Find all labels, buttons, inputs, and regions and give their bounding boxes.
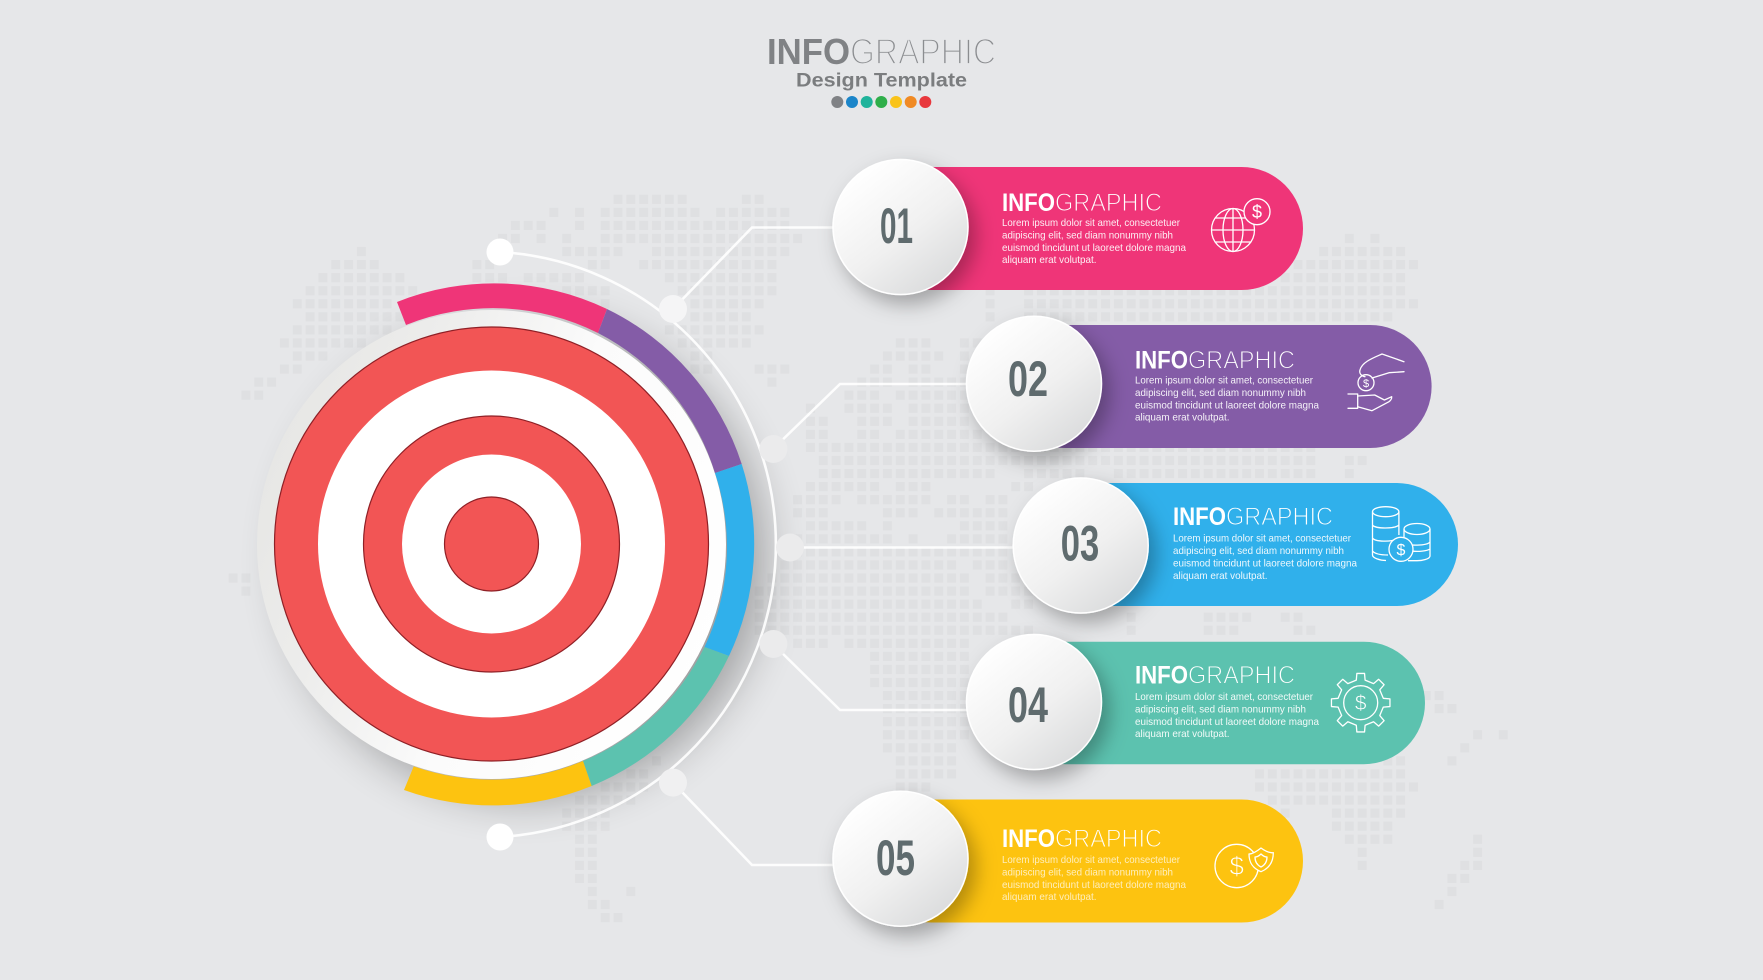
icon: globe and dollar coin: $ (1252, 202, 1262, 222)
body text (1002, 218, 1186, 266)
body text: aliquam erat volutpat. (1135, 729, 1230, 740)
pill (1050, 483, 1458, 606)
body text: Lorem ipsum dolor sit amet, consectetuer (1135, 376, 1314, 386)
body text: Lorem ipsum dolor sit amet, consectetuer (1135, 692, 1314, 703)
body text: aliquam erat volutpat. (1002, 892, 1096, 903)
panel: 04 teal (966, 634, 1425, 770)
body text: euismod tincidunt ut laoreet dolore magna (1135, 400, 1319, 411)
heading: GRAPHIC (1226, 503, 1333, 531)
body text: Lorem ipsum dolor sit amet, consectetuer (1002, 855, 1181, 866)
pill (1004, 325, 1432, 448)
body text (1135, 376, 1319, 424)
icon: globe and dollar coin (1212, 199, 1270, 252)
heading: INFO (1173, 503, 1226, 531)
number 02: 02 (1008, 351, 1048, 407)
dotted world map (227, 193, 1510, 924)
icon: coin stacks: $ (1397, 542, 1406, 559)
body text: adipiscing elit, sed diam nonummy nibh (1002, 230, 1173, 241)
body text: adipiscing elit, sed diam nonummy nibh (1173, 546, 1344, 557)
connector nodes (486, 238, 804, 850)
body text: euismod tincidunt ut laoreet dolore magna (1135, 717, 1319, 728)
heading: GRAPHIC (1055, 825, 1162, 853)
heading: INFO (1002, 189, 1055, 217)
panel: 02 purple (966, 316, 1432, 451)
title: INFOGRAPHIC: GRAPHIC (850, 31, 996, 72)
number 05: 05 (876, 830, 915, 886)
body text (1002, 855, 1186, 903)
target bullseye (274, 327, 708, 761)
connector to 02 (773, 384, 970, 449)
connector arc (500, 252, 776, 837)
heading: INFO (1002, 825, 1055, 853)
body text (1173, 534, 1357, 582)
ring segment: blue (704, 464, 754, 656)
connector to 01 (673, 228, 840, 309)
connector network (500, 228, 1020, 865)
number badge (1013, 478, 1148, 613)
heading: INFO (1135, 662, 1188, 690)
number 03: 03 (1061, 516, 1099, 572)
number badge (966, 634, 1102, 770)
header title block (767, 31, 996, 108)
icon: gear with dollar (1331, 673, 1390, 732)
body text (1135, 692, 1319, 740)
body text: aliquam erat volutpat. (1002, 255, 1096, 266)
base disc (257, 310, 726, 779)
number badge (833, 160, 968, 294)
icon: dollar coin and shield: $ (1229, 851, 1244, 881)
heading: INFO (1135, 346, 1188, 374)
icon: hands and coin (1348, 354, 1404, 411)
target shadow (285, 320, 765, 800)
panel: 01 pink (833, 160, 1303, 294)
subtitle: Design Template: Design Template (796, 70, 967, 92)
connector to 04 (773, 644, 970, 710)
number badge (833, 791, 968, 926)
title: INFOGRAPHIC: INFO (767, 31, 850, 72)
pill (870, 800, 1303, 922)
body text: Lorem ipsum dolor sit amet, consectetuer (1173, 534, 1352, 545)
coloured segmented ring (397, 283, 754, 805)
number 04: 04 (1008, 677, 1048, 733)
heading: GRAPHIC (1188, 662, 1295, 690)
heading: GRAPHIC (1188, 346, 1295, 374)
body text: adipiscing elit, sed diam nonummy nibh (1002, 867, 1173, 878)
body text: aliquam erat volutpat. (1135, 413, 1230, 424)
ring segment: pink (397, 283, 607, 333)
body text: aliquam erat volutpat. (1173, 571, 1268, 582)
number 01: 01 (880, 198, 913, 254)
icon: gear with dollar: $ (1355, 692, 1367, 715)
number badge (966, 316, 1102, 451)
icon: coin stacks (1372, 507, 1430, 561)
ring segment: teal (583, 647, 729, 786)
body text: euismod tincidunt ut laoreet dolore magna (1002, 880, 1186, 891)
ring segment: yellow (404, 761, 592, 805)
body text: adipiscing elit, sed diam nonummy nibh (1135, 704, 1306, 715)
colour dots row (831, 96, 931, 108)
ring segment: purple (598, 309, 742, 473)
icon: hands and coin: $ (1363, 378, 1369, 390)
connector to 03 (790, 546, 1020, 549)
panel: 03 blue (1013, 478, 1458, 613)
connector to 05 (673, 783, 840, 865)
panel: 05 yellow (833, 791, 1303, 926)
body text: euismod tincidunt ut laoreet dolore magna (1002, 243, 1186, 254)
icon: dollar coin and shield (1215, 844, 1273, 888)
heading: GRAPHIC (1055, 189, 1162, 217)
body text: adipiscing elit, sed diam nonummy nibh (1135, 388, 1306, 399)
body text: euismod tincidunt ut laoreet dolore magna (1173, 558, 1357, 570)
pill (870, 167, 1303, 290)
body text: Lorem ipsum dolor sit amet, consectetuer (1002, 218, 1181, 229)
pill (1004, 642, 1425, 764)
